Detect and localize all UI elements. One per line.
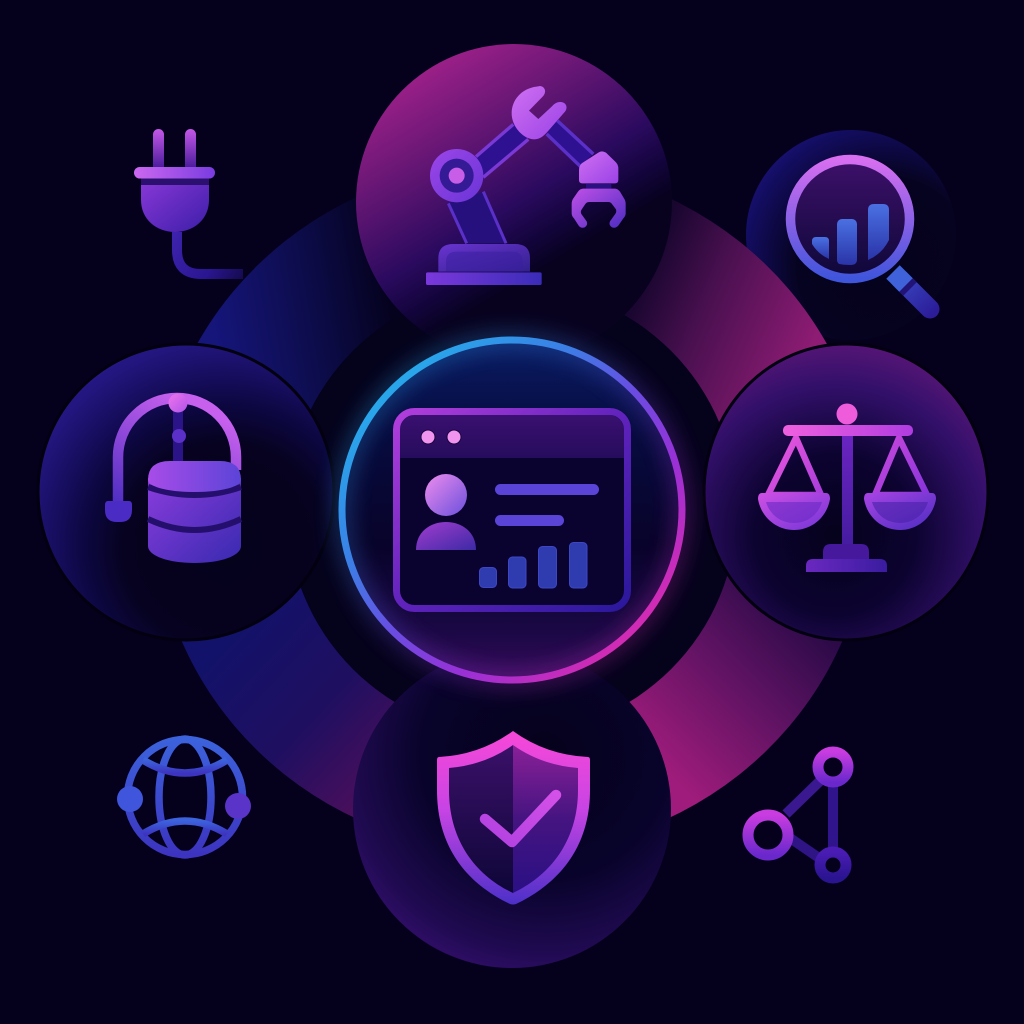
wrench head xyxy=(512,86,567,139)
right triangle xyxy=(875,438,927,495)
panel: robot circle xyxy=(356,44,672,360)
panel: shield circle xyxy=(353,650,671,968)
cylinder lid xyxy=(148,461,241,492)
cylinder body xyxy=(148,478,241,563)
lower arm xyxy=(447,192,507,243)
segmented ring xyxy=(182,198,842,818)
beam xyxy=(783,425,913,436)
handle xyxy=(893,272,930,309)
scale base xyxy=(806,544,887,572)
left pan xyxy=(758,493,830,530)
shield right half xyxy=(513,745,578,893)
shield rim xyxy=(437,731,590,904)
left triangle xyxy=(768,438,821,495)
gripper neck xyxy=(586,184,611,189)
icon: robot arm xyxy=(426,86,626,285)
icon: globe xyxy=(117,739,251,855)
plug bar xyxy=(134,167,215,178)
icon: database with arch xyxy=(105,394,241,563)
bar chart xyxy=(480,542,587,588)
text lines xyxy=(495,484,599,526)
robot base xyxy=(426,244,542,285)
window dots xyxy=(421,430,461,444)
lens rim xyxy=(790,160,910,278)
top knob xyxy=(168,394,188,412)
central glowing ring xyxy=(342,340,682,680)
panel: magnifier badge circle xyxy=(746,130,956,340)
post xyxy=(842,436,853,546)
arch xyxy=(118,398,236,502)
gripper head xyxy=(579,151,618,183)
connector xyxy=(173,410,183,462)
small dot xyxy=(172,429,186,443)
gripper claw xyxy=(572,189,626,228)
cylinder bands xyxy=(148,487,241,530)
icon: dashboard window xyxy=(396,412,628,608)
upper arm xyxy=(475,123,528,178)
icon: power plug xyxy=(134,129,243,274)
plug body xyxy=(141,178,209,232)
cord xyxy=(177,232,243,274)
panel: database circle xyxy=(38,344,334,640)
lens fill xyxy=(794,163,906,275)
prongs xyxy=(153,129,196,168)
panel: scales circle xyxy=(704,344,988,640)
knob xyxy=(836,404,858,424)
foot xyxy=(105,501,132,522)
check mark xyxy=(485,795,556,842)
user avatar xyxy=(416,474,476,550)
icon: network nodes xyxy=(748,752,848,878)
shield left half xyxy=(449,745,513,893)
right pan xyxy=(864,493,936,530)
panel: central dark disc xyxy=(287,285,737,735)
lens bars xyxy=(812,204,889,265)
forearm xyxy=(547,120,593,167)
icon: shield with check xyxy=(437,731,590,904)
icon: magnifier with bars xyxy=(790,160,930,309)
icon: balance scales xyxy=(758,404,936,572)
shoulder joint xyxy=(430,149,483,202)
globe nodes xyxy=(117,786,251,819)
